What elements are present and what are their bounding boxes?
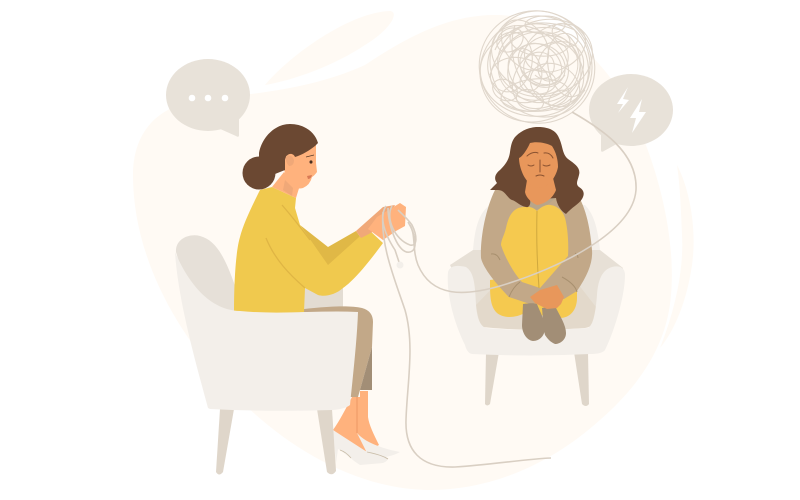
thread trailing to floor xyxy=(383,212,551,467)
eyebrow xyxy=(306,155,314,157)
thigh xyxy=(280,306,373,397)
body and near arm xyxy=(234,187,383,314)
shoes xyxy=(357,433,400,458)
near hand xyxy=(368,203,406,240)
eye xyxy=(310,160,312,164)
therapist figure xyxy=(234,124,406,465)
facial features xyxy=(527,152,553,176)
hair xyxy=(490,127,584,214)
therapist chair cushion xyxy=(300,285,343,315)
bun xyxy=(242,156,276,190)
neck skin xyxy=(525,178,556,205)
neck xyxy=(272,172,300,198)
torso and sleeves xyxy=(481,190,592,304)
speech bubble: left with dots xyxy=(166,59,250,137)
face xyxy=(519,142,558,188)
far sleeve xyxy=(300,225,361,266)
speech bubble: right with lightning bolts xyxy=(589,74,673,152)
sleeve folds xyxy=(491,253,578,297)
tangled thread ball xyxy=(461,0,611,142)
shaded trouser leg xyxy=(360,347,372,390)
hands xyxy=(530,285,564,309)
lower legs xyxy=(333,391,379,452)
background blob xyxy=(133,11,694,490)
feet xyxy=(522,303,545,341)
patient chair xyxy=(448,205,625,406)
yellow upper legs xyxy=(501,205,568,288)
far hand xyxy=(356,205,395,238)
ear xyxy=(286,156,294,166)
sweater fold lines xyxy=(266,205,310,288)
patient figure xyxy=(481,127,592,344)
hair xyxy=(259,124,318,174)
thread from ball to therapist xyxy=(410,112,636,292)
therapist chair front xyxy=(175,252,358,474)
therapist chair back xyxy=(176,235,242,330)
mouth xyxy=(307,175,312,179)
thread loops in hands xyxy=(383,206,416,268)
face xyxy=(284,143,317,188)
yellow lower legs xyxy=(490,275,577,318)
neck shadow xyxy=(283,180,293,196)
neck xyxy=(522,178,557,210)
